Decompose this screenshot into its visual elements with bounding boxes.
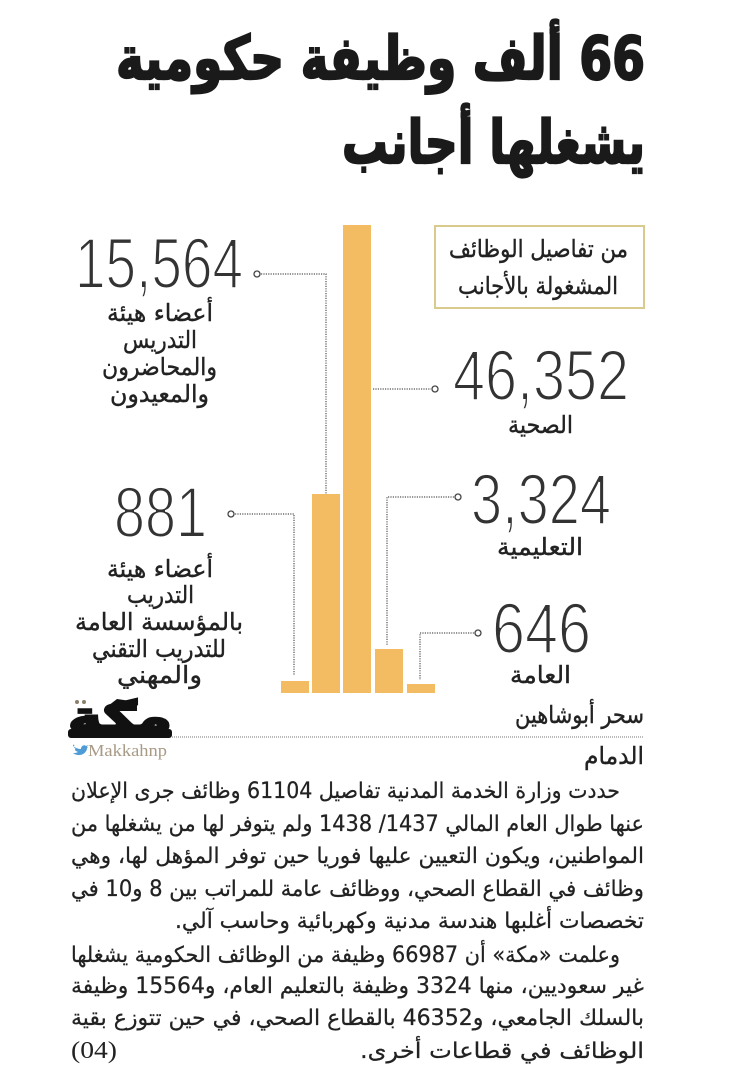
byline: سحر أبوشاهين (515, 699, 644, 729)
article body: بالسلك الجامعي، و46352 بالقطاع الصحي، في حين تتوزع بقية (71, 1006, 644, 1031)
article body: (04) (71, 1038, 117, 1064)
article body: غير سعوديين، منها 3324 وظيفة بالتعليم العام، و15564 وظيفة (71, 974, 644, 999)
callout: 881 training staff: بالمؤسسة العامة (75, 608, 243, 636)
logo: Makkah newspaper: Makkahnp (88, 741, 167, 760)
callout: 15,564 teaching staff (75, 225, 326, 494)
callout: 46,352 health: الصحية (508, 411, 573, 439)
legend box: المشغولة بالأجانب (458, 271, 618, 300)
callout: 646 general: 646 (492, 590, 591, 669)
dateline: الدمام (584, 742, 644, 770)
logo: Makkah newspaper: مكة (68, 692, 172, 741)
callout: 15,564 teaching staff: 15,564 (75, 225, 243, 304)
callout: 646 general: العامة (510, 661, 571, 689)
callout: 3,324 education: التعليمية (497, 533, 583, 561)
callout: 15,564 teaching staff: أعضاء هيئة (107, 297, 213, 327)
article body: وظائف في القطاع الصحي، ووظائف عامة للمراتب بين 8 و10 في (71, 877, 644, 902)
bar chart (281, 225, 435, 693)
callout: 881 training staff: والمهني (117, 661, 202, 689)
callout: 15,564 teaching staff: والمحاضرون (102, 353, 217, 381)
article body: المواطنين، ويكون التعيين عليها فوريا حين توفر المؤهل لها، وهي (71, 844, 644, 869)
callout: 46,352 health (373, 337, 629, 439)
callout: 881 training staff: أعضاء هيئة (107, 553, 213, 583)
article body: تخصصات أغلبها هندسة مدنية وكهربائية وحاسب آلي. (175, 906, 644, 934)
article body: الوظائف في قطاعات أخرى. (360, 1036, 644, 1064)
callout: 3,324 education: 3,324 (471, 461, 611, 540)
callout: 646 general (420, 590, 591, 689)
legend box (435, 226, 644, 308)
legend box: من تفاصيل الوظائف (449, 235, 628, 263)
callout: 3,324 education (387, 461, 611, 645)
logo: Makkah newspaper (68, 692, 172, 760)
title (116, 19, 645, 178)
title: يشغلها أجانب (342, 103, 645, 178)
article body: عنها طوال العام المالي 1437/ 1438 ولم يتوفر لها من يشغلها من (71, 812, 644, 837)
article body (71, 779, 644, 1064)
article body: وعلمت «مكة» أن 66987 وظيفة من الوظائف الحكومية يشغلها (71, 940, 620, 968)
title: 66 ألف وظيفة حكومية (116, 19, 645, 94)
callout: 15,564 teaching staff: والمعيدون (110, 380, 209, 408)
callout: 881 training staff: للتدريب التقني (92, 635, 226, 663)
callout: 46,352 health: 46,352 (453, 337, 629, 416)
callout: 881 training staff (75, 474, 294, 689)
callout: 15,564 teaching staff: التدريس (123, 326, 197, 354)
callout: 881 training staff: 881 (114, 474, 207, 553)
article body: حددت وزارة الخدمة المدنية تفاصيل 61104 وظائف جرى الإعلان (71, 779, 620, 804)
callout: 881 training staff: التدريب (127, 581, 194, 609)
